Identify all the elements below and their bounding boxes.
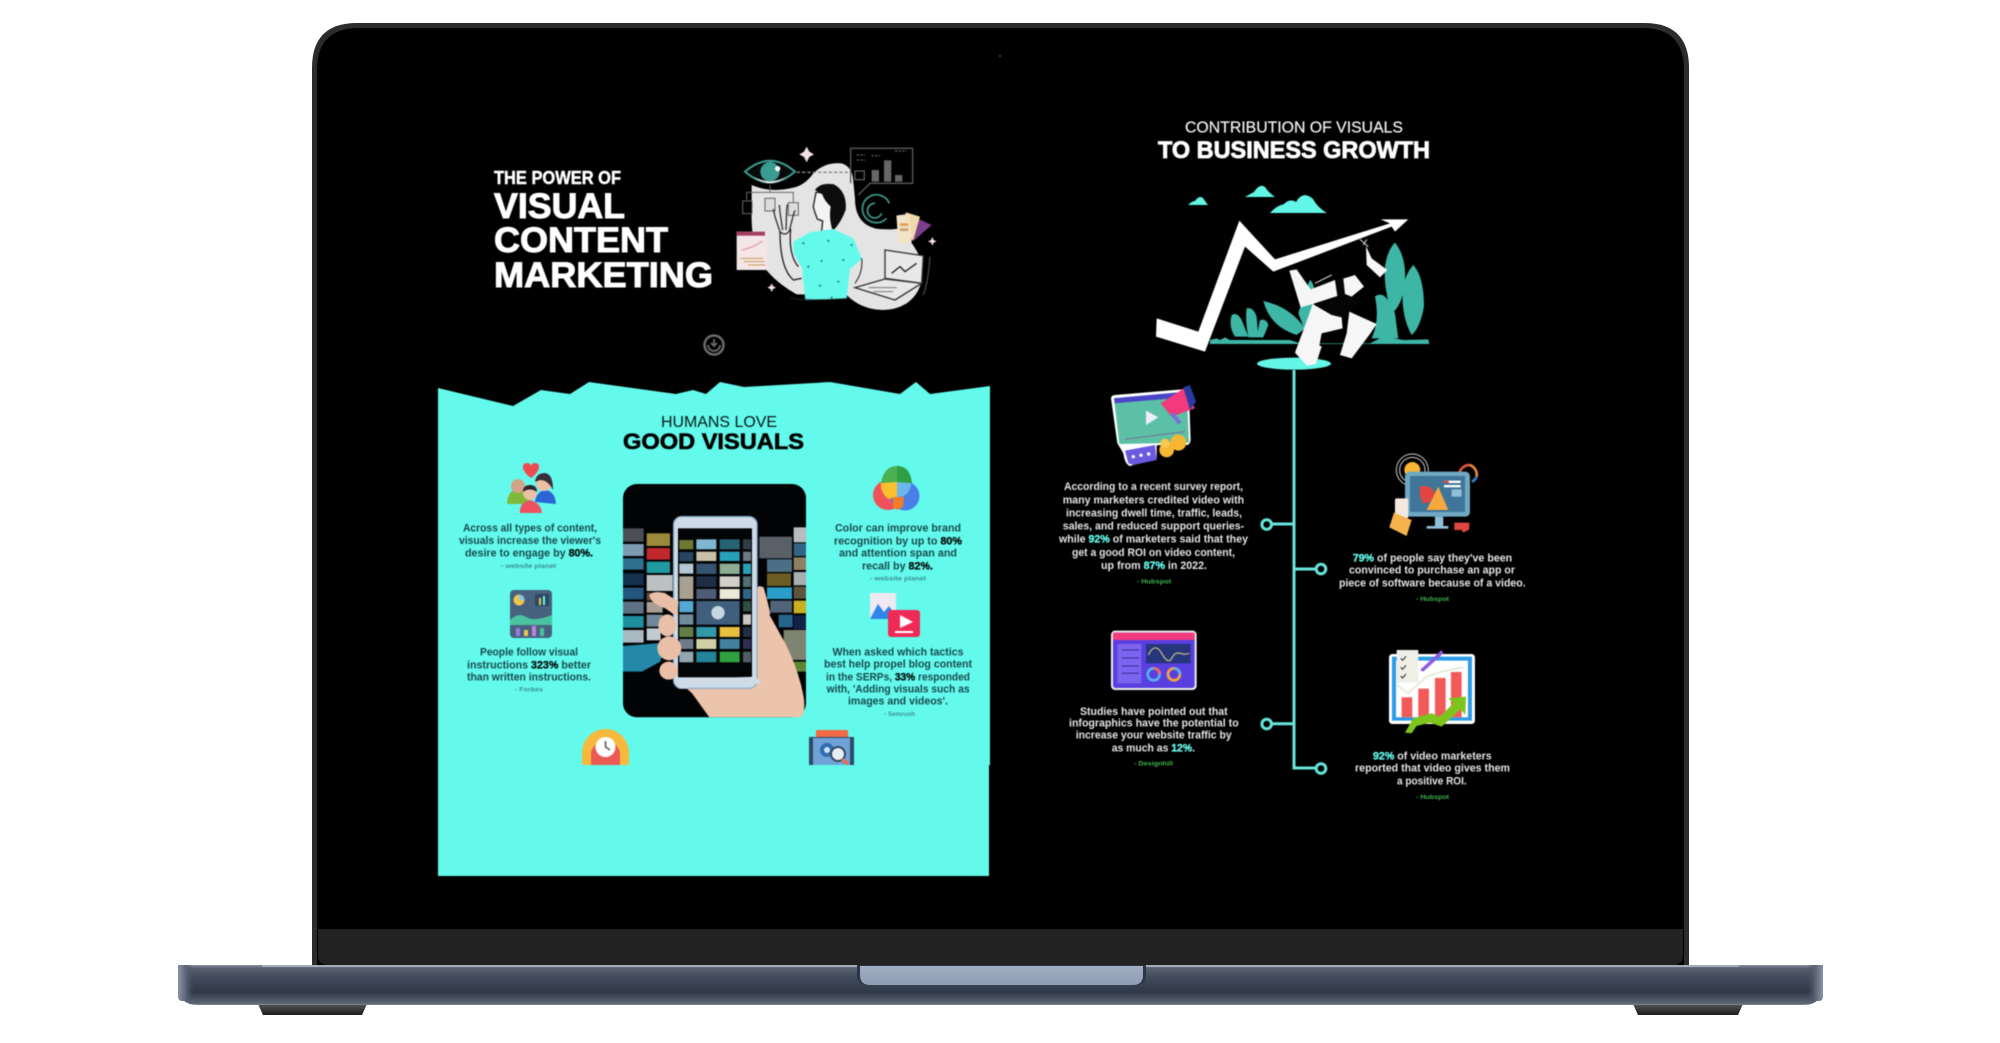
text: according to survey: sales, and reduced support queries- [1063, 520, 1245, 532]
text: according to survey: - Hubspot [1137, 578, 1172, 585]
palm [677, 586, 804, 717]
icon: image and video [870, 593, 920, 637]
icon: dashboard [510, 590, 552, 638]
text: according to survey: get a good ROI on video content, [1072, 547, 1235, 559]
eye [745, 161, 795, 183]
text: studies: infographics have the potential to [1069, 718, 1239, 730]
shoulder line [790, 258, 862, 300]
text: when asked: When asked which tactics [832, 647, 964, 659]
panel: humans love good visuals [438, 382, 990, 876]
text: when asked: with, 'Adding visuals such as [826, 684, 970, 696]
heading [623, 414, 804, 454]
text: across all types: - website planet [501, 563, 557, 570]
timeline node [1316, 564, 1326, 574]
disc [1257, 358, 1331, 370]
text: studies: - Designhill [1134, 761, 1173, 768]
title: contribution of visuals to business growth: CONTRIBUTION OF VISUALS [1185, 120, 1403, 137]
text: color can improve: Color can improve brand [835, 522, 961, 534]
sparkles [767, 147, 937, 292]
fingers [649, 592, 681, 680]
text: 79 percent: piece of software because of a video. [1339, 578, 1526, 590]
text: across all types: Across all types of content, [463, 522, 597, 534]
icon: color circles [873, 466, 920, 510]
text: 79 percent: convinced to purchase an app or [1349, 564, 1516, 576]
title: the power of visual content marketing: VISUAL [494, 187, 625, 226]
text: according to survey: According to a recent survey report, [1064, 481, 1243, 493]
laptop sketch [855, 250, 930, 300]
text: across all types [459, 522, 601, 570]
text: according to survey [1058, 481, 1249, 585]
title: the power of visual content marketing: CONTENT [494, 221, 668, 260]
text: people follow: - Forbes [515, 687, 543, 694]
text: studies: Studies have pointed out that [1080, 706, 1228, 718]
illustration: growth arrow and person [1156, 219, 1429, 370]
text: according to survey: many marketers credited video with [1063, 494, 1244, 506]
growth arrow [1156, 219, 1408, 352]
shirt dots [802, 240, 853, 299]
screen content [438, 120, 1526, 876]
text: when asked: - Semrush [884, 711, 915, 718]
text: people follow [467, 647, 592, 694]
laptop lid [312, 23, 1689, 965]
text: people follow: People follow visual [480, 647, 578, 659]
plants [1210, 243, 1429, 344]
document [737, 232, 767, 270]
gray blob [752, 163, 923, 310]
text: people follow: than written instructions. [467, 672, 591, 684]
arm grip lines [1315, 239, 1368, 283]
clouds [1188, 186, 1327, 213]
text: color can improve: - website planet [870, 576, 927, 582]
neck and face [813, 192, 834, 232]
photo background [623, 484, 806, 717]
panel background [438, 382, 990, 876]
text: when asked: best help propel blog content [824, 659, 972, 671]
text: across all types: desire to engage by 80%. [465, 548, 593, 560]
title: the power of visual content marketing: MARKETING [494, 256, 713, 295]
g logo [862, 195, 889, 223]
heading: GOOD VISUALS [623, 429, 804, 454]
timeline node [1262, 520, 1271, 529]
text: 79 percent [1339, 552, 1526, 603]
person torso [1312, 275, 1363, 322]
text: according to survey: increasing dwell time, traffic, leads, [1066, 508, 1242, 520]
laptop base [178, 965, 1823, 1005]
icon: head with clock [582, 729, 629, 765]
text: 92 percent: 92% of video marketers [1373, 750, 1492, 762]
timeline node [1316, 764, 1326, 773]
text: 92 percent: a positive ROI. [1397, 776, 1467, 788]
icon: people with heart [507, 463, 556, 513]
title: the power of visual content marketing: THE POWER OF [494, 168, 621, 188]
shirt [793, 229, 862, 300]
text: color can improve: recognition by up to 80% [834, 536, 962, 548]
text: when asked: in the SERPs, 33% responded [826, 671, 970, 683]
text: 92 percent: reported that video gives them [1355, 763, 1510, 775]
text: 79 percent: - Hubspot [1416, 596, 1450, 603]
text: color can improve: and attention span and [839, 548, 957, 560]
flow chart [743, 185, 798, 215]
text: 79 percent: 79% of people say they've been [1353, 552, 1512, 564]
text: studies: increase your website traffic by [1076, 730, 1233, 742]
thumb [758, 587, 770, 621]
title: contribution of visuals to business growth: TO BUSINESS GROWTH [1158, 137, 1430, 164]
leg over disc [1295, 340, 1322, 366]
icon: bar chart [1389, 650, 1475, 733]
dashboard [797, 148, 913, 195]
phone body [674, 517, 757, 688]
text: according to survey: while 92% of marketers said that they [1058, 534, 1249, 546]
text: color can improve: recall by 82%. [862, 560, 933, 572]
text: studies [1069, 706, 1239, 768]
text: color can improve [834, 522, 962, 582]
icon: monitor and idea [1389, 454, 1477, 536]
hand [773, 204, 795, 234]
person [1289, 246, 1387, 363]
text: across all types: visuals increase the viewer's [459, 535, 601, 547]
illustration: person with visuals [737, 147, 937, 310]
icon: gear and magnifier [809, 730, 854, 765]
timeline [1262, 370, 1326, 773]
text: when asked: images and videos'. [848, 696, 948, 708]
icon: video and megaphone [1111, 385, 1196, 466]
phone tiles [679, 539, 751, 662]
text: when asked [824, 647, 972, 718]
left wall tiles [623, 528, 673, 672]
title: contribution of visuals to business growth [1158, 120, 1430, 164]
right wall tiles [759, 527, 806, 672]
text: studies: as much as 12%. [1112, 743, 1195, 755]
color swatches [896, 212, 932, 244]
hair [815, 184, 846, 231]
text: people follow: instructions 323% better [467, 660, 592, 672]
text: 92 percent [1355, 750, 1510, 801]
laptop [178, 23, 1823, 1015]
text: according to survey: up from 87% in 2022. [1101, 560, 1207, 572]
text: 92 percent: - Hubspot [1416, 794, 1450, 801]
laptop feet [258, 1004, 1743, 1015]
timeline node [1262, 719, 1271, 729]
arm [780, 229, 802, 280]
heading: HUMANS LOVE [661, 414, 777, 431]
photo: hand holding phone [623, 484, 806, 717]
title: the power of visual content marketing [494, 168, 713, 295]
icon: analytics window [1111, 631, 1197, 690]
icon: download circle [704, 336, 724, 354]
